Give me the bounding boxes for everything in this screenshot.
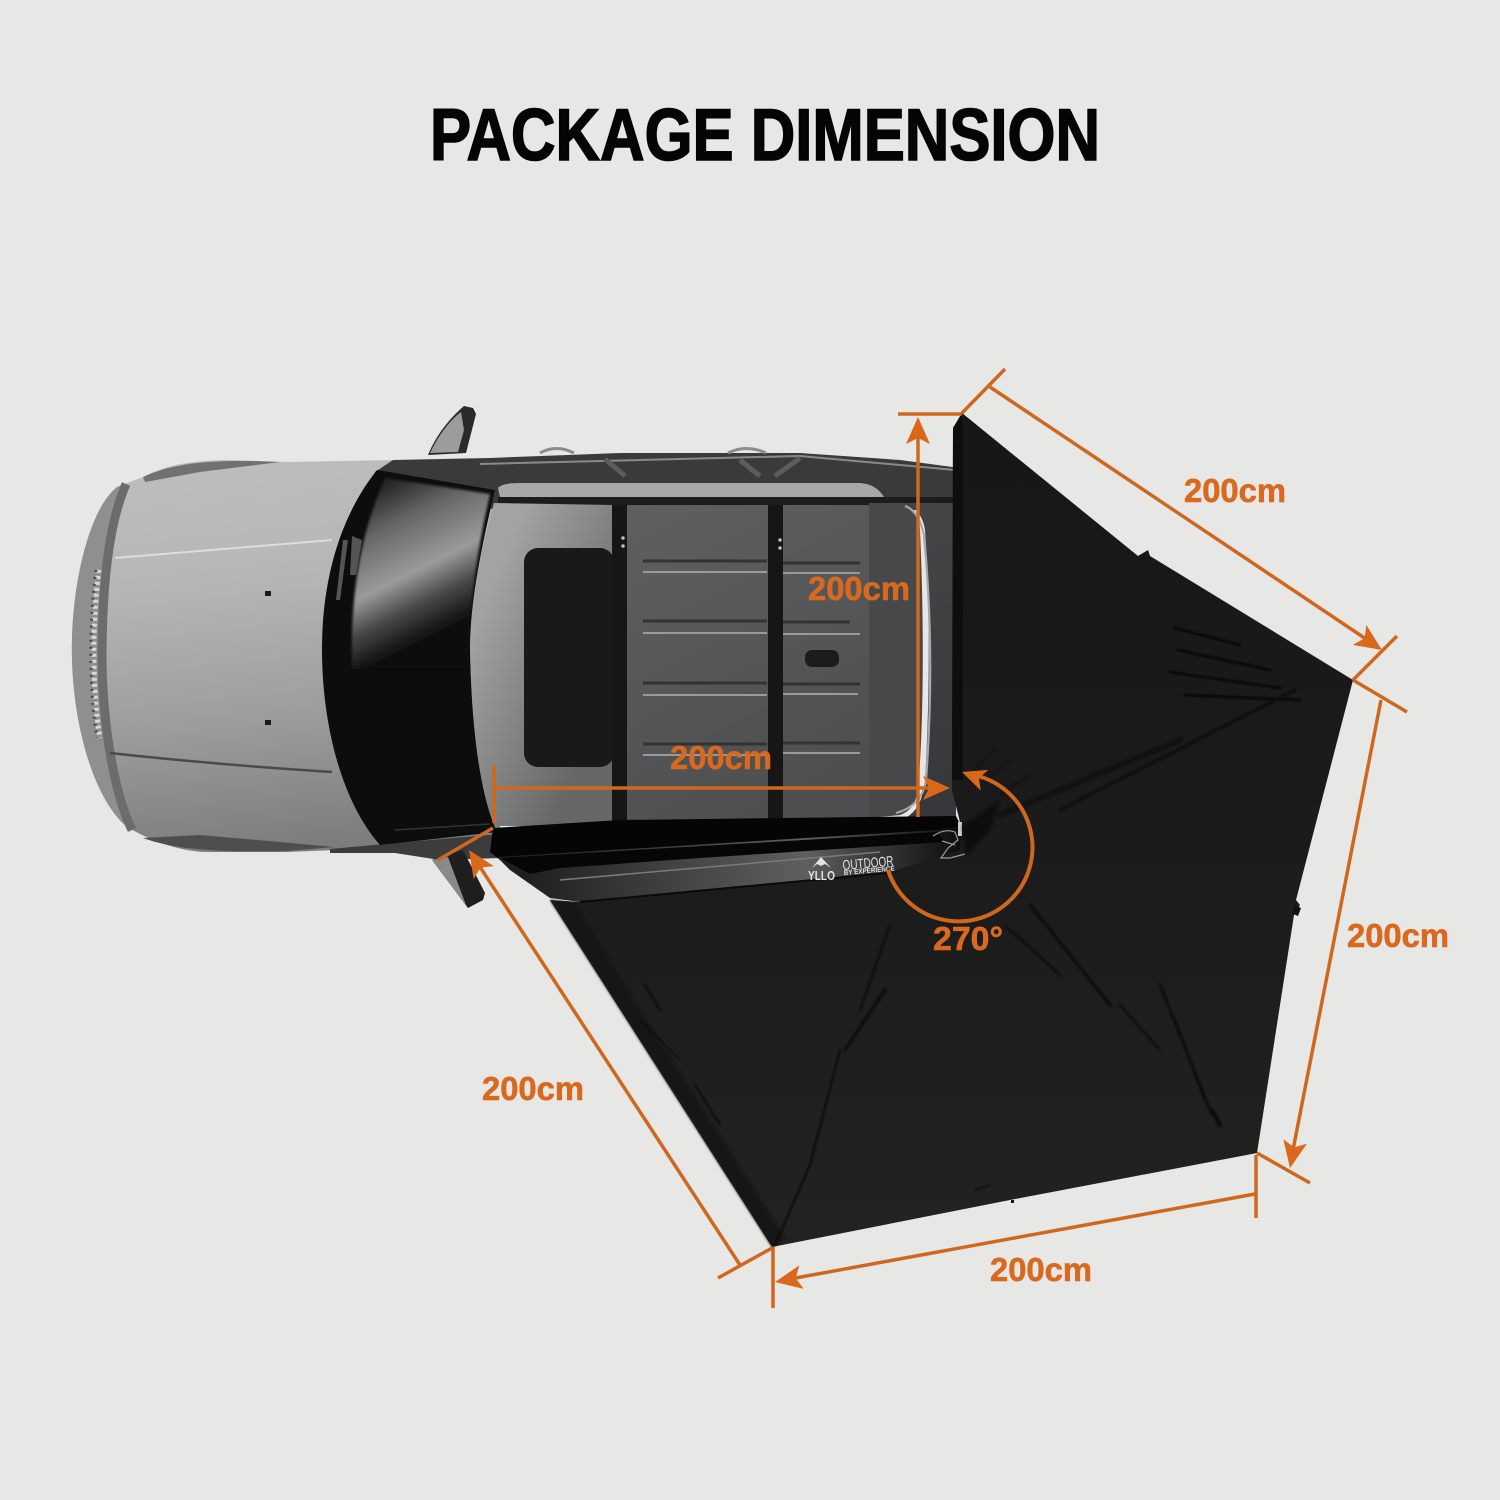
lower body strip: [330, 834, 500, 860]
hood creases and washer jets: [110, 540, 332, 772]
roof ribs: [643, 561, 860, 755]
roof panels: [625, 505, 771, 820]
dimension: horizontal on car: 200cm: [670, 739, 772, 776]
windshield: [322, 470, 497, 845]
icon: bottom mirror: [432, 850, 485, 908]
logo: YLLO Outdoor by Experience: [808, 853, 895, 883]
roof bars: [612, 505, 783, 823]
dimension: 270 degree arc: [888, 762, 1032, 957]
dimension: left edge: 200cm: [482, 1070, 584, 1107]
logo: YLLO Outdoor by Experience: BY EXPERIENCE: [844, 866, 895, 877]
awning canopy: [550, 413, 1353, 1247]
roof rail top: [375, 448, 960, 510]
dimension: horizontal on car: [494, 739, 950, 823]
dimension: vertical on car: [808, 414, 962, 817]
logo: YLLO Outdoor by Experience: YLLO: [808, 868, 835, 883]
icon: top mirror: [428, 406, 476, 455]
car top view: [72, 406, 962, 908]
dimension: right edge: [1257, 680, 1449, 1183]
title: PACKAGE DIMENSION: [430, 95, 1100, 176]
hood and front body: [72, 460, 500, 852]
logo: YLLO Outdoor by Experience: OUTDOOR: [842, 853, 894, 873]
front bumper and grille: [72, 461, 335, 851]
dimension: 270 degree arc: 270°: [933, 920, 1003, 957]
dimension: bottom edge: 200cm: [990, 1251, 1092, 1288]
dimension: vertical on car: 200cm: [808, 570, 910, 607]
dimension: top-right edge: [962, 369, 1397, 680]
dark left edge band: [550, 900, 785, 1247]
dimension: top-right edge: 200cm: [1184, 472, 1286, 509]
hinge bracket: [933, 831, 965, 858]
top-left folded edge: [952, 413, 963, 780]
rear roof section: [869, 503, 956, 820]
roof front section: [470, 503, 614, 826]
door handle: [805, 650, 839, 667]
canopy clip notches: [1011, 905, 1301, 1203]
dimension: left edge: [438, 828, 772, 1278]
dimension: bottom edge: [773, 1155, 1256, 1308]
canopy seams and wrinkles: [640, 628, 1300, 1245]
bottom black band: [490, 816, 962, 860]
sunroof: [524, 548, 614, 767]
dimension: right edge: 200cm: [1347, 917, 1449, 954]
awning storage bag: [497, 800, 1000, 902]
